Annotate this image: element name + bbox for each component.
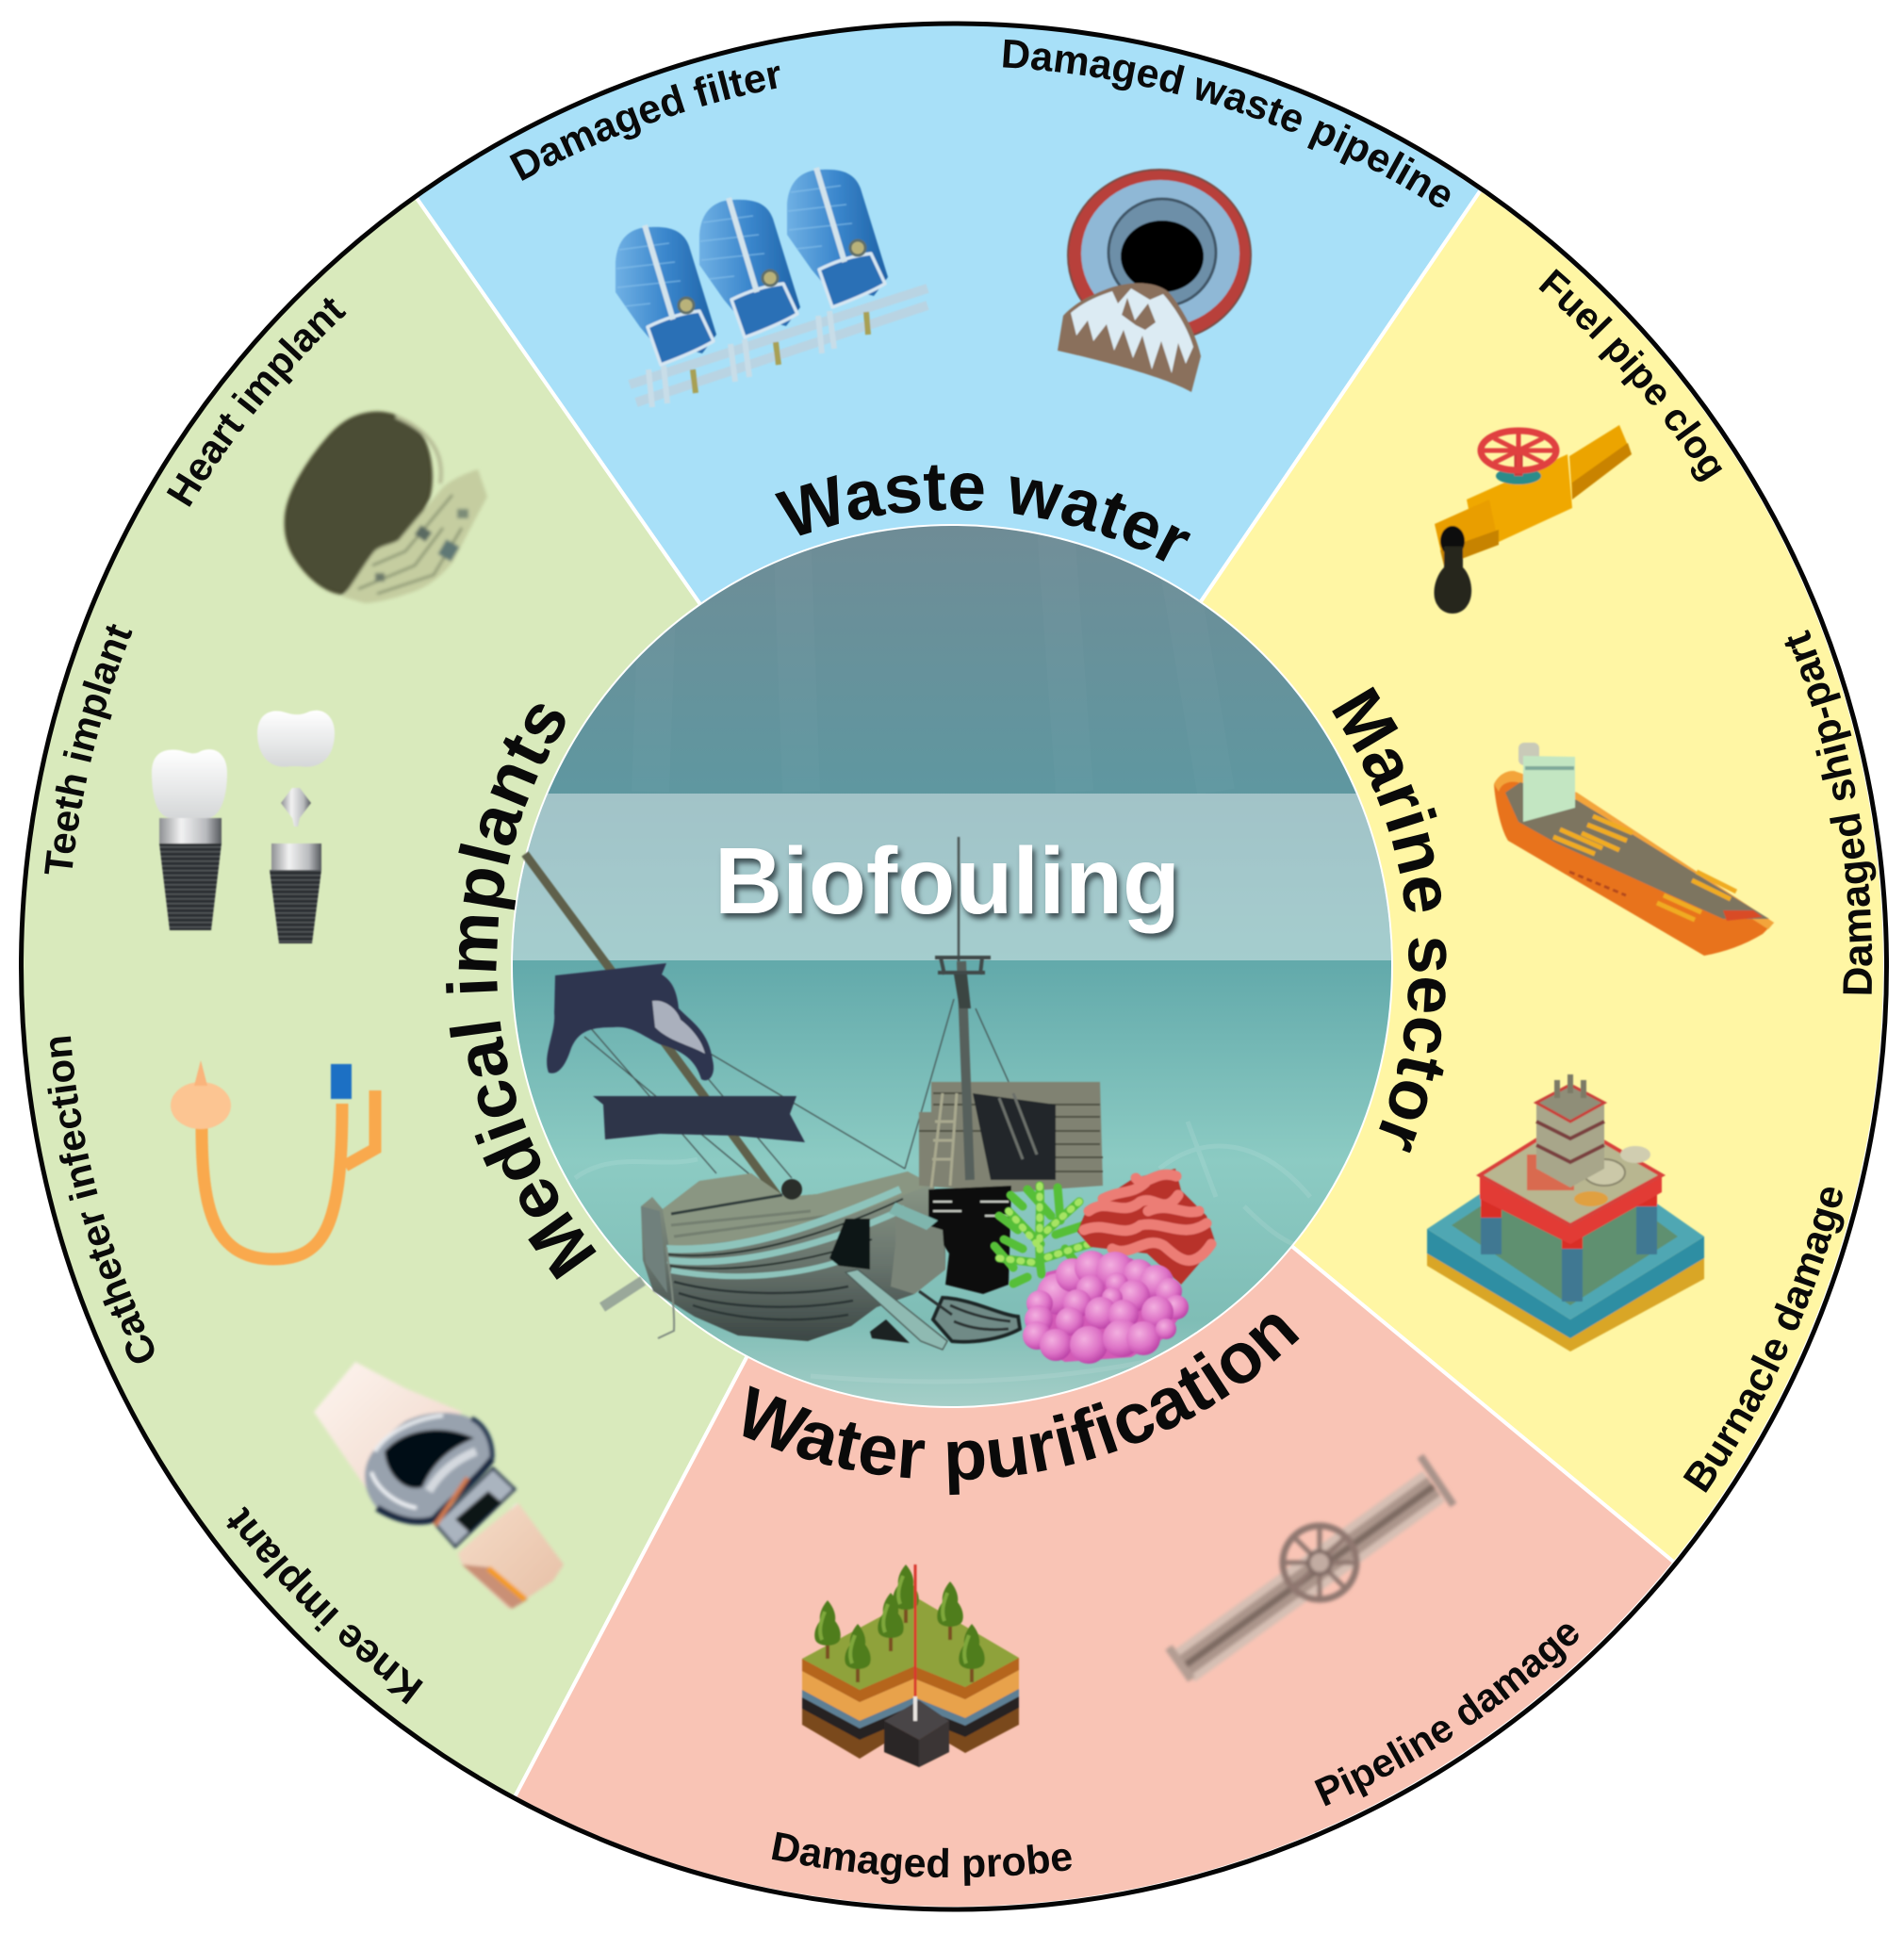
- panel: central Biofouling scene: [509, 523, 1395, 1409]
- icon: offshore platform: [1427, 1074, 1704, 1351]
- panel: Waste water: [415, 26, 1478, 604]
- wreck cabin: [919, 1082, 1103, 1192]
- heading: Water purification: Water purification: [743, 1315, 1300, 1495]
- illustration: green coral: [994, 1186, 1089, 1284]
- panel: Marine sector: [1199, 190, 1883, 1560]
- icon: catheter: [171, 1060, 375, 1259]
- icon: filter tanks: [616, 168, 927, 407]
- illustration: shipwreck: [525, 837, 1103, 1350]
- illustration: pink coral: [1023, 1251, 1189, 1364]
- label: Teeth implant: Teeth implant: [44, 624, 132, 875]
- label: Heart implant: Heart implant: [166, 298, 347, 507]
- heading: Waste water: Waste water: [775, 466, 1191, 562]
- title: Biofouling: Biofouling: [714, 828, 1180, 934]
- band behind title: [509, 794, 1395, 960]
- illustration: red coral: [1077, 1169, 1216, 1285]
- icon: dental implants: [152, 711, 335, 943]
- panel: Water purification: [514, 1246, 1674, 1907]
- label: Damaged ship-part: Damaged ship-part: [1784, 630, 1876, 994]
- icon: damaged pipeline valve: [1169, 1456, 1453, 1679]
- label: Pipeline damage: Pipeline damage: [1314, 1625, 1579, 1806]
- heading: Medical implants: Medical implants: [446, 704, 597, 1280]
- label: Damaged probe: Damaged probe: [771, 1832, 1072, 1886]
- label: Fuel pipe clog: Fuel pipe clog: [1538, 269, 1723, 482]
- icon: knee implant: [314, 1362, 564, 1609]
- heading: Marine sector: Marine sector: [1332, 686, 1447, 1154]
- icon: leaking fuel pipe: [1434, 425, 1632, 614]
- label: Damaged filter: Damaged filter: [509, 66, 780, 181]
- label: Damaged waste pipeline: Damaged waste pipeline: [1003, 40, 1450, 207]
- panel: Medical implants: [24, 200, 745, 1794]
- label: Burnacle damage: Burnacle damage: [1683, 1188, 1844, 1493]
- icon: ground probe: [802, 1564, 1019, 1767]
- label: Catheter infection: Catheter infection: [47, 1037, 155, 1363]
- icon: cargo ship: [1494, 743, 1774, 956]
- icon: pacemaker heart implant: [286, 413, 487, 603]
- icon: damaged waste pipe: [1058, 170, 1251, 392]
- label: Knee implant: Knee implant: [226, 1506, 423, 1704]
